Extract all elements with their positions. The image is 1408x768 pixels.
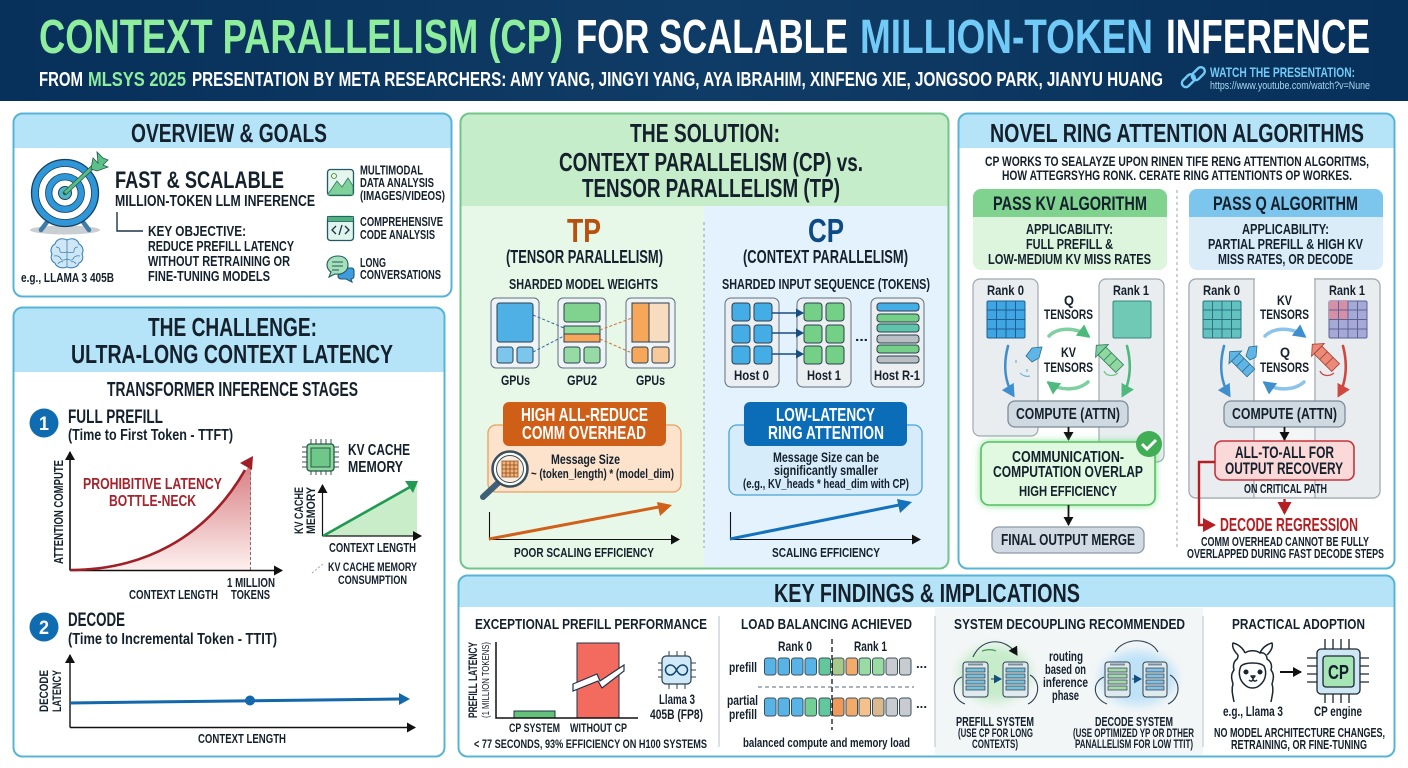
- column: pass Q algorithm: [1187, 189, 1384, 561]
- callout: high all-reduce overhead: ~ (token_length) * (model_dim): [531, 466, 674, 481]
- chip label: 405B (FP8): [650, 706, 703, 722]
- bar chart: prefill latency: [468, 642, 638, 735]
- heading: [71, 312, 393, 369]
- callout: low-latency ring attention: (e.g., KV_heads * head_dim with CP): [743, 476, 909, 491]
- tensor labels: KV: [1277, 292, 1293, 308]
- subheading: TRANSFORMER INFERENCE STAGES: [107, 379, 358, 401]
- use case: multimodal: MULTIMODAL: [360, 162, 423, 178]
- callout: low-latency ring attention: [729, 402, 922, 495]
- chart: KV cache memory: CONTEXT LENGTH: [329, 540, 416, 555]
- heading: THE CHALLENGE:: [148, 312, 317, 342]
- text: key objective: KEY OBJECTIVE:: [148, 223, 246, 240]
- icon labels: [1223, 703, 1362, 719]
- icon: llama: [1232, 643, 1273, 702]
- caption: [1214, 725, 1385, 752]
- icon: CP engine chip: [1307, 639, 1369, 703]
- heading: ULTRA-LONG CONTEXT LATENCY: [71, 339, 393, 369]
- all-to-all box: [1215, 441, 1354, 480]
- chart: scaling efficiency: [730, 499, 920, 560]
- chart: poor scaling efficiency: [489, 502, 679, 560]
- KV cache heading: KV CACHE: [348, 442, 410, 459]
- heading: KEY FINDINGS & IMPLICATIONS: [774, 578, 1080, 608]
- system decoupling background: [935, 608, 1203, 755]
- chart: decode latency: CONTEXT LENGTH: [198, 731, 286, 746]
- callout: low-latency ring attention: Message Size can be: [773, 449, 879, 465]
- step 1 label: [68, 407, 233, 444]
- decode regression note: [1187, 515, 1384, 561]
- prefill system caption: [956, 714, 1034, 751]
- prefill system caption: CONTEXTS): [972, 739, 1018, 751]
- pass KV heading card: [973, 189, 1167, 270]
- icon labels: e.g., Llama 3: [1223, 703, 1283, 719]
- column: pass KV algorithm: [973, 189, 1167, 553]
- chart: poor scaling efficiency: POOR SCALING EFFICIENCY: [514, 545, 654, 560]
- model example label: e.g., LLAMA 3 405B: [21, 270, 114, 285]
- callout: low-latency ring attention: LOW-LATENCY: [776, 405, 875, 425]
- pass Q heading card: APPLICABILITY:: [1242, 221, 1329, 238]
- rank boxes: Rank 1: [1329, 282, 1365, 298]
- row labels: prefill: [729, 706, 757, 722]
- ellipsis marks: ...: [916, 656, 927, 671]
- icon: code: [328, 216, 354, 240]
- diagram: decode cloud: [1095, 641, 1178, 705]
- rank labels: Rank 0: [778, 638, 812, 654]
- chart: attention compute curve: [52, 452, 282, 602]
- note: KV cache memory consumption: CONSUMPTION: [338, 573, 407, 587]
- heading: TENSOR PARALLELISM (TP): [582, 173, 840, 203]
- connector bracket: [117, 212, 143, 231]
- title: FOR SCALABLE: [576, 11, 848, 64]
- tensor block: rank 1: [1113, 301, 1151, 338]
- row labels: partial: [727, 692, 758, 708]
- step 1 badge: [30, 408, 58, 438]
- host labels: [734, 328, 920, 383]
- host labels: Host R-1: [874, 367, 920, 383]
- presentation link: WATCH THE PRESENTATION:: [1210, 64, 1355, 80]
- tensor labels: Q: [1064, 292, 1074, 308]
- rank boxes: Rank 0: [1203, 282, 1240, 298]
- pass KV heading card: PASS KV ALGORITHM: [993, 194, 1147, 215]
- final output merge: FINAL OUTPUT MERGE: [1001, 532, 1135, 549]
- note: KV cache memory consumption: KV CACHE MEMORY: [328, 560, 417, 574]
- ring arrows: [1221, 329, 1346, 395]
- use case: multimodal: DATA ANALYSIS: [360, 175, 434, 190]
- panel: overview and goals: [14, 114, 452, 296]
- pass Q heading card: PASS Q ALGORITHM: [1213, 194, 1358, 215]
- GPU labels: GPUs: [636, 372, 665, 388]
- tensor labels: [1260, 292, 1309, 375]
- chart: attention compute curve: 1 MILLION: [227, 575, 275, 590]
- panel: key findings and implications: [458, 576, 1394, 756]
- tensor labels: TENSORS: [1260, 306, 1309, 322]
- chart: attention compute curve: PROHIBITIVE LATENCY: [83, 476, 222, 493]
- text: fast and scalable: [115, 167, 315, 210]
- overlap box: COMPUTATION OVERLAP: [993, 464, 1143, 481]
- host labels: ...: [855, 328, 868, 344]
- overlap box: HIGH EFFICIENCY: [1019, 483, 1117, 500]
- CP heading: CP: [808, 212, 844, 249]
- finding heading: EXCEPTIONAL PREFILL PERFORMANCE: [475, 616, 707, 633]
- CP heading: (CONTEXT PARALLELISM): [743, 247, 908, 267]
- red arrows: [1199, 462, 1284, 525]
- rank labels: [778, 638, 887, 654]
- host labels: Host 1: [807, 367, 841, 383]
- icon: magnifier: [483, 452, 528, 497]
- decode system caption: [1073, 714, 1194, 751]
- all-to-all box: OUTPUT RECOVERY: [1225, 459, 1343, 478]
- icon: image: [328, 170, 354, 196]
- chart: attention compute curve: BOTTLE-NECK: [109, 493, 196, 510]
- note: KV cache memory consumption: [312, 560, 417, 587]
- tensor labels: TENSORS: [1044, 359, 1093, 375]
- use case: code: COMPREHENSIVE: [360, 214, 443, 229]
- chart: attention compute curve: TOKENS: [231, 587, 270, 602]
- finding heading: LOAD BALANCING ACHIEVED: [741, 616, 912, 633]
- chart: KV cache memory: MEMORY: [304, 487, 318, 534]
- compute box: COMPUTE (ATTN): [1232, 406, 1337, 423]
- text: key objective: WITHOUT RETRAINING OR: [148, 253, 290, 270]
- routing label: inference: [1043, 674, 1088, 690]
- step 2 badge: [30, 612, 58, 642]
- routing label: routing: [1049, 648, 1083, 664]
- chart: decode latency: DECODE: [37, 670, 51, 712]
- compute box: [1224, 401, 1345, 427]
- arrow: [1068, 505, 1070, 525]
- routing label: [1043, 648, 1088, 703]
- GPU labels: GPU2: [567, 372, 597, 388]
- KV cache heading: MEMORY: [348, 459, 403, 476]
- TP heading: (TENSOR PARALLELISM): [506, 247, 663, 267]
- rank labels: Rank 1: [854, 638, 887, 654]
- presentation link: https://www.youtube.com/watch?v=Nune: [1210, 80, 1370, 92]
- overlap box: COMMUNICATION-: [1012, 449, 1124, 466]
- diagram: GPUs with sharded weights: [491, 298, 675, 368]
- icon: KV cache chip: [302, 439, 339, 475]
- prefill system caption: (USE CP FOR LONG: [958, 728, 1033, 740]
- use case: conversations: CONVERSATIONS: [360, 267, 441, 282]
- arrow: [1280, 671, 1301, 673]
- chart: KV cache memory: KV CACHE: [292, 487, 306, 534]
- pass KV heading card: LOW-MEDIUM KV MISS RATES: [988, 251, 1151, 268]
- CP heading: [722, 212, 930, 293]
- text: fast and scalable: FAST & SCALABLE: [115, 167, 284, 194]
- heading: OVERVIEW & GOALS: [131, 118, 327, 148]
- finding: exceptional prefill performance: [468, 616, 707, 751]
- icon: brain: [51, 239, 83, 268]
- tensor labels: TENSORS: [1260, 359, 1309, 375]
- title: MILLION-TOKEN: [860, 11, 1153, 64]
- compute box: COMPUTE (ATTN): [1016, 406, 1120, 423]
- rank boxes: [973, 279, 1164, 462]
- result caption: < 77 SECONDS, 93% EFFICIENCY ON H100 SYSTEMS: [474, 737, 707, 751]
- header banner: [0, 0, 1408, 101]
- tensor labels: Q: [1280, 344, 1290, 360]
- step 2 badge: 2: [39, 618, 49, 639]
- finding: load balancing achieved: [727, 616, 927, 750]
- icon: link: [1180, 66, 1206, 89]
- use case: code: CODE ANALYSIS: [360, 227, 435, 242]
- use case: conversations: LONG: [360, 255, 386, 270]
- callout: high all-reduce overhead: [483, 402, 681, 497]
- title: [39, 11, 1370, 64]
- callout: high all-reduce overhead: Message Size: [551, 451, 620, 467]
- presentation link: [1210, 64, 1370, 92]
- finding heading: SYSTEM DECOUPLING RECOMMENDED: [954, 616, 1185, 633]
- bar chart: prefill latency: CP SYSTEM: [509, 721, 560, 735]
- subtitle: authors: FROM: [39, 69, 83, 91]
- tensor labels: [1044, 292, 1093, 375]
- callout: low-latency ring attention: RING ATTENTION: [768, 423, 884, 443]
- step 2 label: [68, 610, 277, 648]
- finding heading: PRACTICAL ADOPTION: [1232, 616, 1365, 633]
- arrow: [1284, 427, 1286, 440]
- arrow: [1068, 427, 1070, 440]
- heading: THE SOLUTION:: [630, 118, 780, 148]
- tensor labels: TENSORS: [1044, 306, 1093, 322]
- ellipsis marks: [916, 656, 927, 711]
- rank boxes: [1189, 278, 1380, 498]
- icon: check badge: [1136, 431, 1162, 457]
- KV cache heading: [348, 442, 410, 476]
- title: CONTEXT PARALLELISM (CP): [39, 11, 563, 64]
- finding: system decoupling recommended: [954, 616, 1194, 751]
- row labels: [727, 659, 758, 722]
- use case: multimodal: (IMAGES/VIDEOS): [360, 188, 445, 203]
- diagram: prefill cloud: [954, 642, 1038, 704]
- step 2 label: DECODE: [68, 610, 125, 631]
- all-to-all box: ALL-TO-ALL FOR: [1235, 443, 1334, 462]
- decode system caption: PANALLELISM FOR LOW TTIT): [1075, 739, 1193, 751]
- moving tensor blocks: [1223, 338, 1342, 379]
- subtitle: authors: MLSYS 2025: [88, 69, 186, 91]
- tensor labels: KV: [1061, 344, 1077, 360]
- ellipsis marks: ...: [916, 696, 927, 711]
- heading: CONTEXT PARALLELISM (CP) vs.: [559, 147, 863, 177]
- tensor grid: rank 0: [1203, 301, 1241, 338]
- diagram: hosts with sharded tokens: [725, 298, 924, 387]
- chart: attention compute curve: CONTEXT LENGTH: [129, 587, 218, 602]
- pass Q heading card: MISS RATES, OR DECODE: [1218, 251, 1353, 268]
- GPU labels: GPUs: [501, 372, 530, 388]
- icon: chat: [327, 256, 354, 282]
- overlap box: [981, 442, 1155, 505]
- routing label: based on: [1045, 661, 1086, 677]
- pass KV heading card: FULL PREFILL &: [1026, 236, 1113, 253]
- token row: partial prefill: [764, 698, 911, 716]
- TP heading: [506, 212, 663, 293]
- pass KV heading card: APPLICABILITY:: [1026, 221, 1113, 238]
- chart: attention compute curve: ATTENTION COMPUTE: [52, 460, 66, 564]
- CP heading: SHARDED INPUT SEQUENCE (TOKENS): [722, 276, 930, 293]
- compute box: [1008, 401, 1128, 427]
- step 1 label: FULL PREFILL: [68, 407, 163, 428]
- chart: scaling efficiency: SCALING EFFICIENCY: [772, 545, 880, 560]
- text: fast and scalable: MILLION-TOKEN LLM INFERENCE: [115, 193, 315, 210]
- bar chart: prefill latency: WITHOUT CP: [570, 721, 627, 735]
- chart: decode latency: LATENCY: [50, 670, 64, 712]
- tensor grid: rank 1: [1329, 301, 1367, 338]
- use case: conversations: [360, 255, 441, 282]
- intro text: [985, 154, 1369, 183]
- step 2 label: (Time to Incremental Token - TTIT): [68, 631, 277, 648]
- prefill system caption: PREFILL SYSTEM: [956, 714, 1034, 729]
- callout: high all-reduce overhead: HIGH ALL-REDUCE: [521, 405, 648, 425]
- icon: target with dart: [30, 152, 108, 234]
- chip label: Llama 3: [659, 691, 695, 707]
- panel: novel ring attention algorithms: [958, 114, 1394, 568]
- TP heading: TP: [567, 212, 601, 249]
- text: key objective: FINE-TUNING MODELS: [148, 268, 270, 285]
- chip label: [650, 691, 703, 722]
- icon labels: CP engine: [1314, 703, 1362, 719]
- routing label: phase: [1052, 687, 1079, 703]
- host labels: Host 0: [734, 367, 769, 383]
- callout: high all-reduce overhead: COMM OVERHEAD: [522, 423, 646, 443]
- ring arrows: [1005, 329, 1130, 395]
- use case: code: [360, 214, 443, 242]
- text: key objective: REDUCE PREFILL LATENCY: [148, 238, 294, 255]
- rank boxes: Rank 1: [1113, 282, 1149, 298]
- final output merge: [992, 527, 1144, 553]
- finding: practical adoption: [1214, 616, 1385, 752]
- icon: CP engine chip: CP: [1328, 662, 1349, 684]
- moving tensor blocks: [1016, 339, 1126, 376]
- decode system caption: DECODE SYSTEM: [1095, 714, 1173, 729]
- chart: KV cache memory: [292, 481, 421, 555]
- TP heading: SHARDED MODEL WEIGHTS: [509, 276, 658, 293]
- chart: decode latency: [37, 655, 415, 746]
- token row: prefill: [764, 658, 911, 675]
- decode system caption: (USE OPTIMIZED YP OR DTHER: [1073, 728, 1194, 740]
- icon: llama chip: [658, 651, 696, 689]
- GPU labels: [501, 372, 665, 388]
- panel: the challenge: [14, 308, 444, 756]
- step 1 badge: 1: [39, 414, 49, 435]
- pass Q heading card: [1189, 189, 1383, 270]
- tensor grid: rank 0: [987, 301, 1025, 338]
- row labels: prefill: [729, 659, 757, 675]
- bar chart: prefill latency: (1 MILLION TOKENS): [481, 642, 492, 718]
- step 1 label: (Time to First Token - TTFT): [68, 427, 233, 444]
- heading: [559, 118, 863, 203]
- bar chart: prefill latency: PREFILL LATENCY: [468, 642, 480, 718]
- callout: low-latency ring attention: significantly smaller: [774, 462, 878, 478]
- caption: balanced compute and memory load: [743, 735, 910, 750]
- use case: multimodal: [360, 162, 445, 203]
- rank boxes: Rank 0: [987, 282, 1024, 298]
- text: key objective: [148, 223, 294, 285]
- critical path label: ON CRITICAL PATH: [1244, 482, 1327, 496]
- panel: the solution: [460, 114, 948, 568]
